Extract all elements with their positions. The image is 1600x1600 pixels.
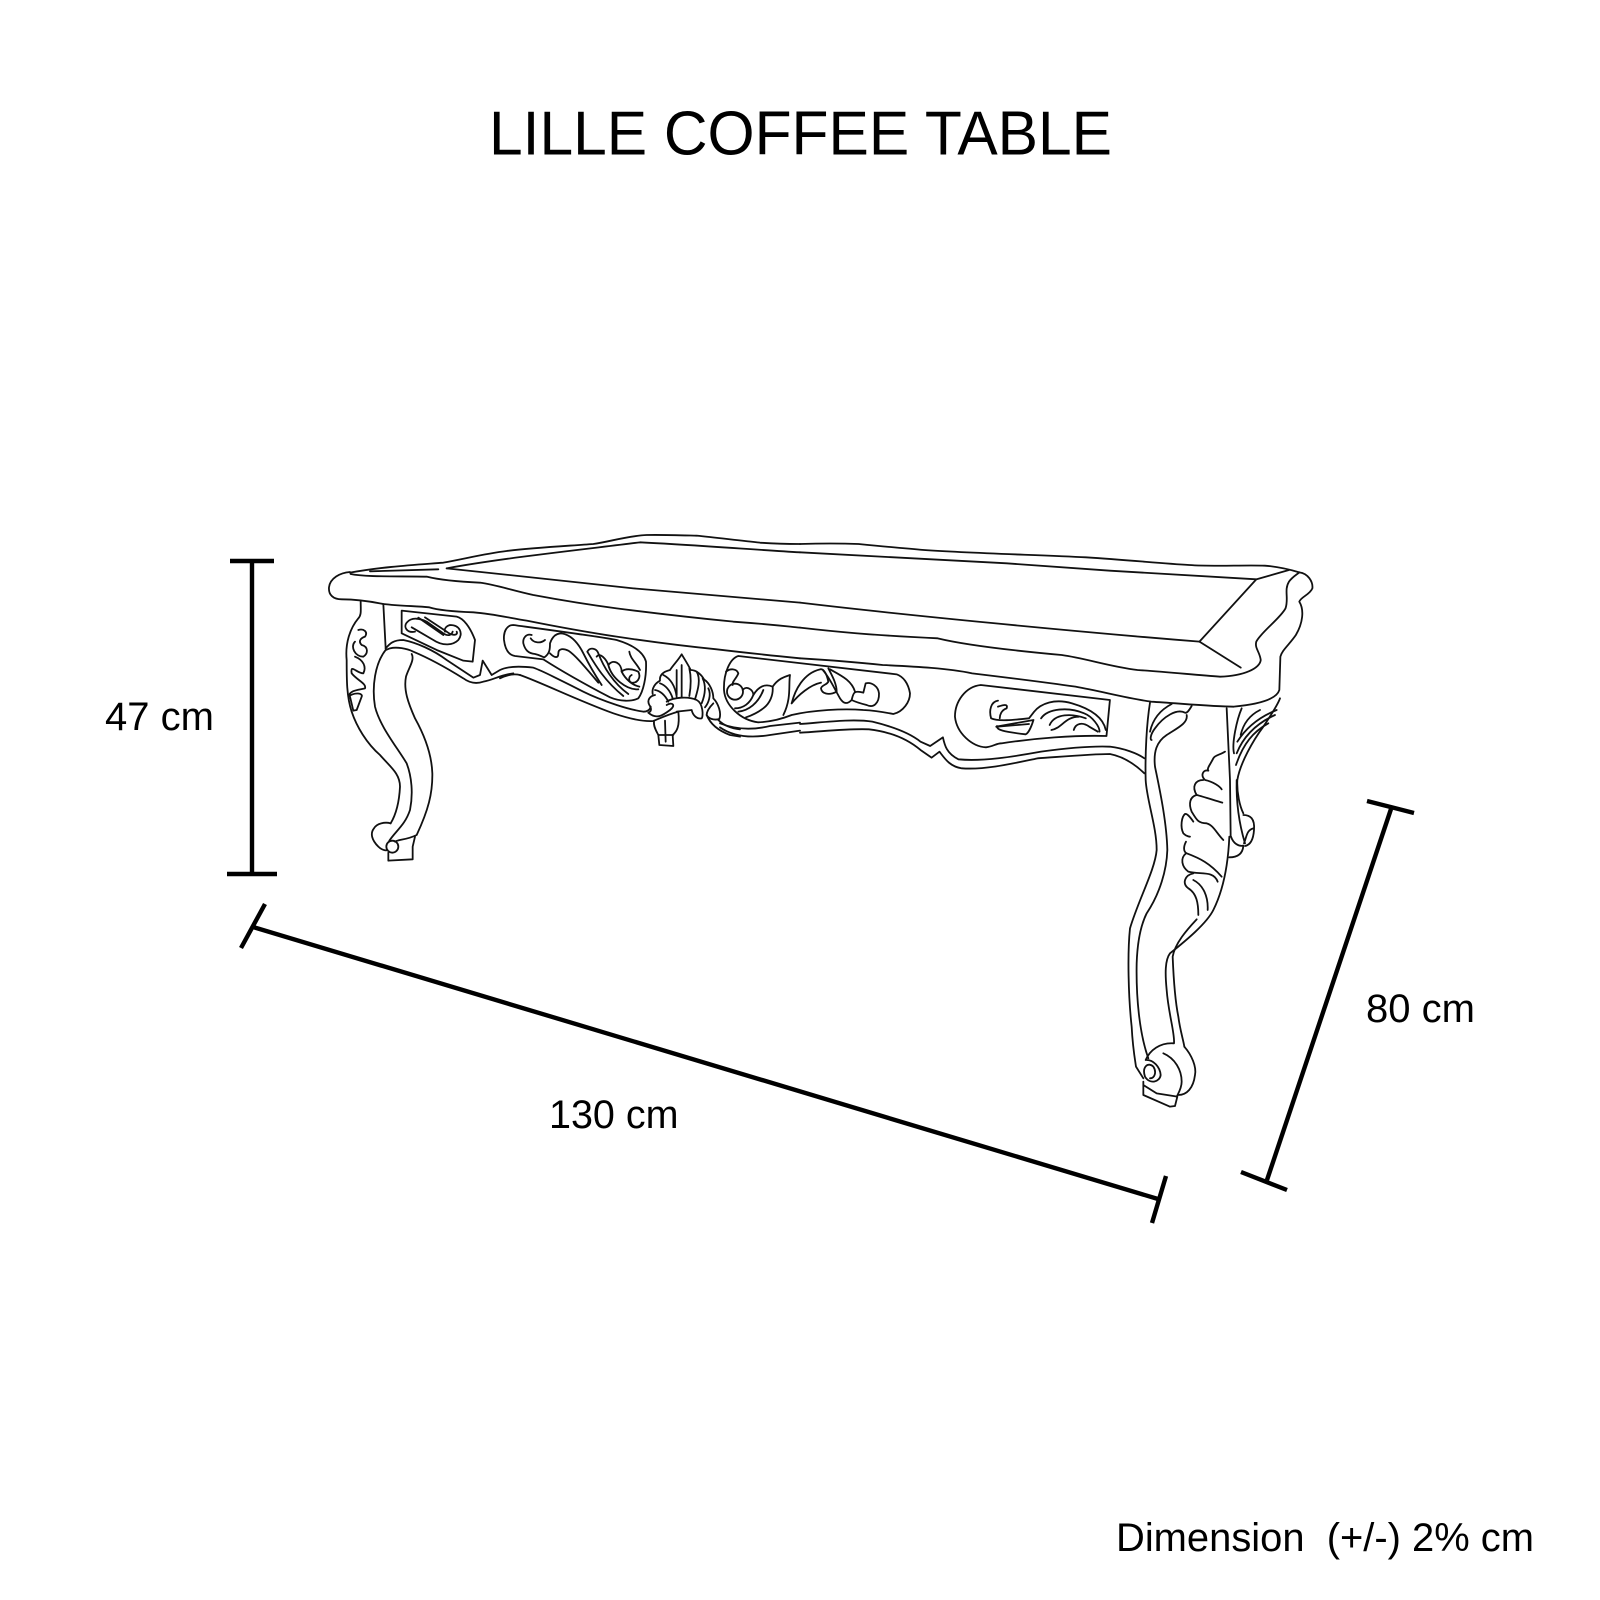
ball foot of right leg: [1143, 1043, 1195, 1107]
height dimension line: [227, 561, 277, 874]
height label: 47 cm: [105, 695, 214, 739]
depth dimension line: [1241, 801, 1414, 1190]
acanthus carving on right leg: [1182, 752, 1225, 915]
carved panel: centre right scroll: [720, 656, 910, 737]
tolerance note: Dimension (+/-) 2% cm: [1116, 1516, 1534, 1560]
coffee table line drawing: [329, 535, 1312, 1107]
table right half: top corner, apron and right carved panel: [800, 543, 1312, 773]
carved leaves on left leg: [348, 630, 367, 711]
right front leg and back leg: [1128, 698, 1280, 1107]
length label: 130 cm: [549, 1093, 679, 1137]
depth label: 80 cm: [1366, 987, 1475, 1031]
carved panel and central shell ornament: [500, 625, 740, 746]
carved panel: right leaf: [955, 685, 1110, 747]
length dimension line: [241, 904, 1166, 1223]
title: LILLE COFFEE TABLE: [489, 100, 1112, 168]
carved panel: left scroll: [402, 611, 475, 662]
table left half: top, left leg and apron: [329, 535, 800, 861]
back right leg: [1229, 698, 1280, 857]
